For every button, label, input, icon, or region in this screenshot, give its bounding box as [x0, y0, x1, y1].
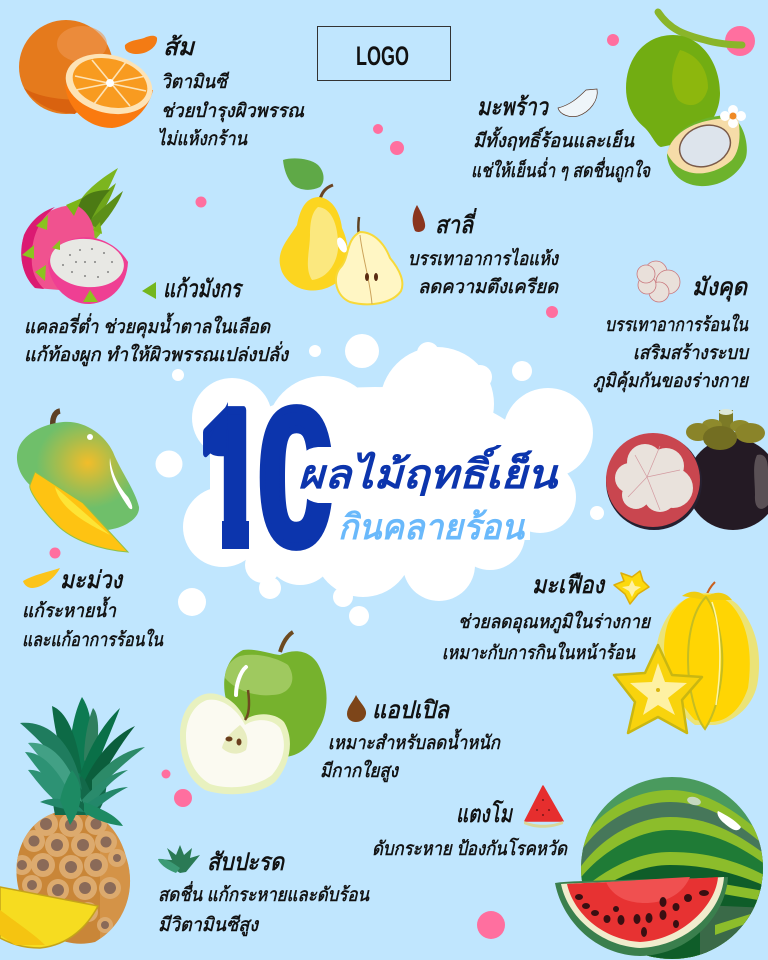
text: apple benefits [320, 728, 501, 782]
heading: apple: แอปเปิล [372, 697, 450, 724]
text: pear benefits: ลดความตึงเครียด [418, 276, 560, 298]
heading: mangosteen: มังคุด [692, 274, 748, 302]
icon: watermelon wedge [524, 786, 563, 828]
text: pear benefits [408, 247, 560, 298]
text: apple benefits: มีกากใยสูง [320, 759, 400, 782]
title: main heading: ผลไม้ฤทธิ์เย็น [298, 445, 559, 497]
text: orange benefits: วิตามินซี [161, 71, 230, 93]
text: orange benefits: ไม่แห้งกร้าน [157, 127, 248, 150]
text: star fruit benefits: เหมาะกับการกินในหน้าร้อน [442, 641, 636, 664]
icon: small star fruit [614, 571, 649, 604]
text: coconut benefits: แช่ให้เย็นฉ่ำ ๆ สดชื่นถูกใจ [471, 157, 651, 182]
illustration: watermelon [555, 777, 768, 960]
heading: dragon fruit: แก้วมังกร [163, 276, 243, 303]
icon: mango slice [23, 568, 60, 588]
title: 10: 0 [257, 368, 336, 587]
illustration: dragon fruit [21, 168, 128, 304]
text: mango benefits: และแก้อาการร้อนใน [22, 628, 164, 651]
text: watermelon benefits: ดับกระหาย ป้องกันโรคหวัด [372, 837, 568, 860]
text: apple benefits: เหมาะสำหรับลดน้ำหนัก [328, 728, 501, 754]
illustration: pear [280, 158, 402, 304]
text: coconut benefits [471, 126, 651, 182]
white cloud behind title [156, 334, 604, 626]
illustration: coconut [626, 12, 747, 186]
illustration: mango [17, 411, 139, 552]
title: 10: 1 [197, 368, 267, 587]
text: mango benefits: แก้ระหายน้ำ [22, 596, 117, 622]
heading: pear: สาลี่ [435, 208, 477, 239]
text: dragon fruit benefits: แก้ท้องผูก ทำให้ผิวพรรณเปล่งปลั่ง [24, 341, 290, 366]
illustration: orange [19, 20, 159, 128]
text: orange benefits: ช่วยบำรุงผิวพรรณ [161, 101, 304, 122]
text: mangosteen benefits: เสริมสร้างระบบ [633, 343, 750, 364]
illustration: pineapple [0, 697, 145, 950]
text: mangosteen benefits: ภูมิคุ้มกันของร่างกาย [593, 371, 750, 392]
heading: coconut: มะพร้าว [477, 94, 549, 121]
title: subheading: กินคลายร้อน [338, 508, 526, 547]
text: star fruit benefits: ช่วยลดอุณหภูมิในร่างกาย [458, 610, 652, 633]
heading: star fruit: มะเฟือง [532, 572, 606, 599]
text: pineapple benefits: มีวิตามินซีสูง [158, 914, 260, 936]
text: star fruit benefits [442, 610, 652, 664]
heading: watermelon: แตงโม [456, 800, 513, 828]
text: pineapple benefits [158, 881, 370, 936]
heading: orange: ส้ม [163, 34, 195, 61]
icon: apple seed drop [347, 695, 366, 722]
logo box: LOGO [356, 41, 409, 71]
illustration: apple [180, 632, 327, 794]
icon: pear seed [413, 205, 425, 232]
text: dragon fruit benefits [24, 312, 290, 366]
text: pear benefits: บรรเทาอาการไอแห้ง [408, 247, 559, 270]
illustration: mangosteen [606, 409, 768, 530]
icon: orange segment [125, 36, 157, 54]
text: mango benefits [22, 596, 164, 651]
text: coconut benefits: มีทั้งฤทธิ์ร้อนและเย็น [473, 126, 635, 152]
icon: mangosteen flesh [637, 261, 680, 302]
text: dragon fruit benefits: แคลอรี่ต่ำ ช่วยคุมน้ำตาลในเลือด [24, 312, 272, 338]
icon: green scale [142, 282, 156, 299]
text: mangosteen benefits [593, 313, 750, 392]
heading: mango: มะม่วง [60, 567, 124, 594]
text: orange benefits [157, 71, 304, 150]
icon: pineapple crown [158, 845, 200, 873]
icon: coconut flesh [558, 89, 597, 117]
text: pineapple benefits: สดชื่น แก้กระหายและดับร้อน [158, 881, 370, 906]
logo box [318, 26, 450, 80]
illustration: star fruit [614, 582, 759, 733]
heading: pineapple: สับปะรด [207, 849, 285, 876]
